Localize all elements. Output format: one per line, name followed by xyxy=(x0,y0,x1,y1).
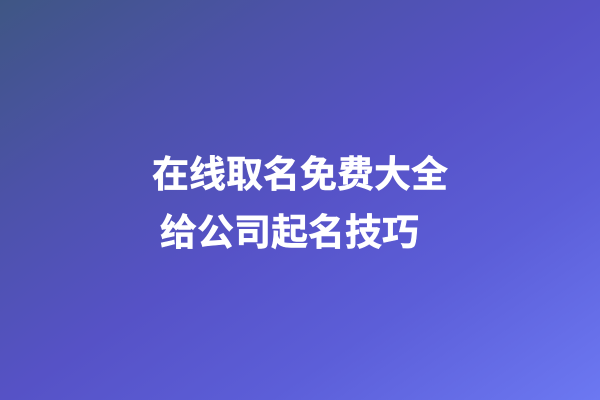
title line 1: 在线取名免费大全 xyxy=(152,154,448,195)
title line 2: 给公司起名技巧 xyxy=(160,212,419,253)
title xyxy=(152,154,448,253)
